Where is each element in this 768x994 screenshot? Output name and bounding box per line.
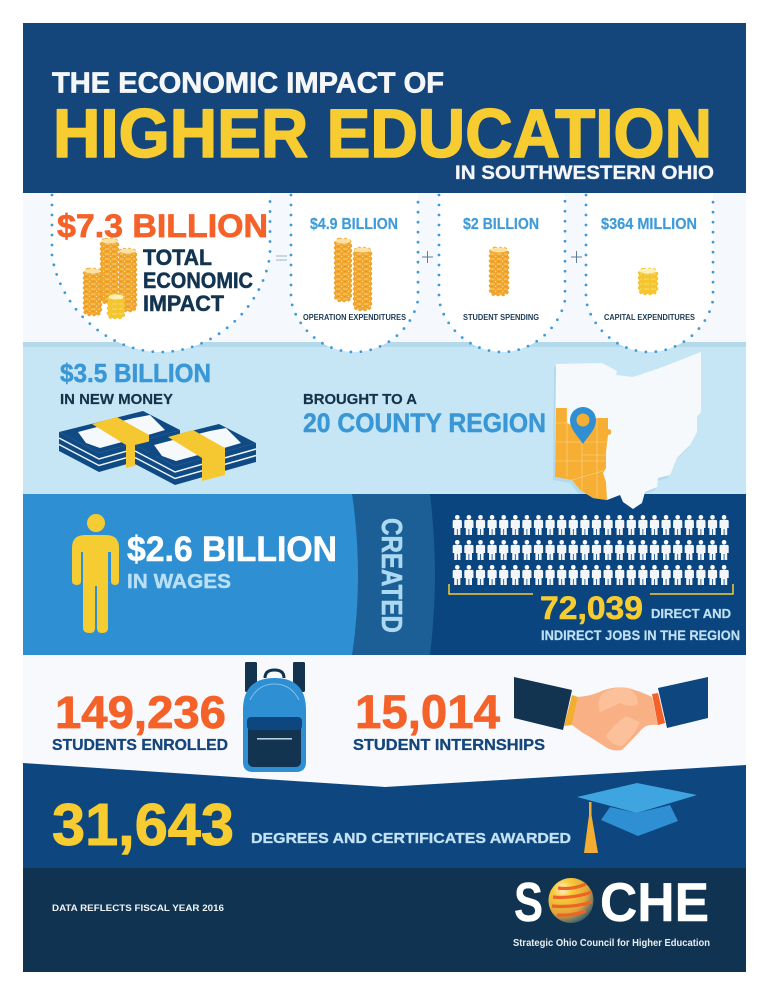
panel: operation expenditures <box>291 193 418 352</box>
panel: operation expenditures: OPERATION EXPENDITURES <box>303 313 407 322</box>
jobs text: INDIRECT JOBS IN THE REGION <box>541 628 740 643</box>
plus sign <box>571 251 582 263</box>
internships stat: 15,014 <box>355 685 500 738</box>
wages text <box>127 530 337 593</box>
bracket <box>449 584 733 594</box>
icon: person <box>72 514 119 633</box>
students enrolled stat: 149,236 <box>55 687 226 738</box>
title line 1: THE ECONOMIC IMPACT OF <box>52 68 444 100</box>
icon: globe <box>548 878 594 923</box>
icon: backpack <box>243 662 306 772</box>
navy degrees band <box>23 763 746 868</box>
panel: total economic impact <box>52 193 270 352</box>
plus sign <box>422 251 433 263</box>
data note: DATA REFLECTS FISCAL YEAR 2016 <box>52 903 224 914</box>
icon: coins <box>335 238 371 310</box>
orange counties <box>555 408 611 500</box>
panel: capital expenditures: $364 MILLION <box>601 216 697 233</box>
wages text: $2.6 BILLION <box>127 530 337 569</box>
created ribbon <box>352 494 435 655</box>
degrees stat: 31,643 <box>52 792 234 858</box>
jobs text: 72,039 <box>540 590 643 626</box>
heading: county region: 20 COUNTY REGION <box>303 408 546 438</box>
panel: student spending <box>439 193 565 352</box>
label: total economic impact <box>143 245 253 316</box>
title line 2: HIGHER EDUCATION <box>53 95 712 172</box>
internships stat: STUDENT INTERNSHIPS <box>353 737 545 754</box>
jobs text <box>540 590 740 643</box>
degrees stat <box>52 792 571 858</box>
background sections <box>23 193 746 790</box>
created label: CREATED <box>375 518 407 633</box>
title line 3: IN SOUTHWESTERN OHIO <box>455 163 714 184</box>
label: total economic impact: ECONOMIC <box>143 268 253 293</box>
heading: new money: IN NEW MONEY <box>60 391 173 408</box>
people icon grid <box>453 515 729 585</box>
jobs text: DIRECT AND <box>651 607 731 621</box>
equals sign <box>276 256 287 260</box>
icon: money stacks <box>59 411 256 485</box>
icon: coins <box>639 268 657 294</box>
icon: coin stacks <box>84 238 136 318</box>
panel: operation expenditures: $4.9 BILLION <box>310 216 398 233</box>
internships stat <box>353 685 545 754</box>
panel: wages and jobs band <box>23 494 746 655</box>
total amount: $7.3 BILLION <box>57 208 268 244</box>
logo: SOCHE: S <box>514 871 543 933</box>
logo: SOCHE: Strategic Ohio Council for Higher Education <box>513 938 710 949</box>
heading: county region: BROUGHT TO A <box>303 392 418 408</box>
icon: location pin <box>570 407 596 444</box>
panel: capital expenditures: CAPITAL EXPENDITURES <box>604 313 696 322</box>
header panel <box>23 23 746 193</box>
degrees stat: DEGREES AND CERTIFICATES AWARDED <box>251 830 571 847</box>
logo: SOCHE <box>513 871 710 949</box>
panel: student spending: $2 BILLION <box>463 216 539 233</box>
icon: handshake <box>514 677 708 750</box>
heading: new money: $3.5 BILLION <box>60 358 211 388</box>
wages text: IN WAGES <box>127 570 231 593</box>
logo: SOCHE: CHE <box>600 871 709 933</box>
ohio map <box>555 352 701 509</box>
icon: coins <box>490 248 508 295</box>
heading: new money <box>60 358 211 408</box>
footer panel <box>23 868 746 972</box>
label: total economic impact: IMPACT <box>143 291 225 316</box>
panel: student spending: STUDENT SPENDING <box>463 313 539 322</box>
panel: capital expenditures <box>586 193 713 352</box>
ohio map shadow <box>553 355 699 512</box>
heading: county region <box>303 392 546 438</box>
students enrolled stat: STUDENTS ENROLLED <box>52 737 228 754</box>
icon: graduation cap <box>577 783 697 853</box>
label: total economic impact: TOTAL <box>143 245 212 270</box>
